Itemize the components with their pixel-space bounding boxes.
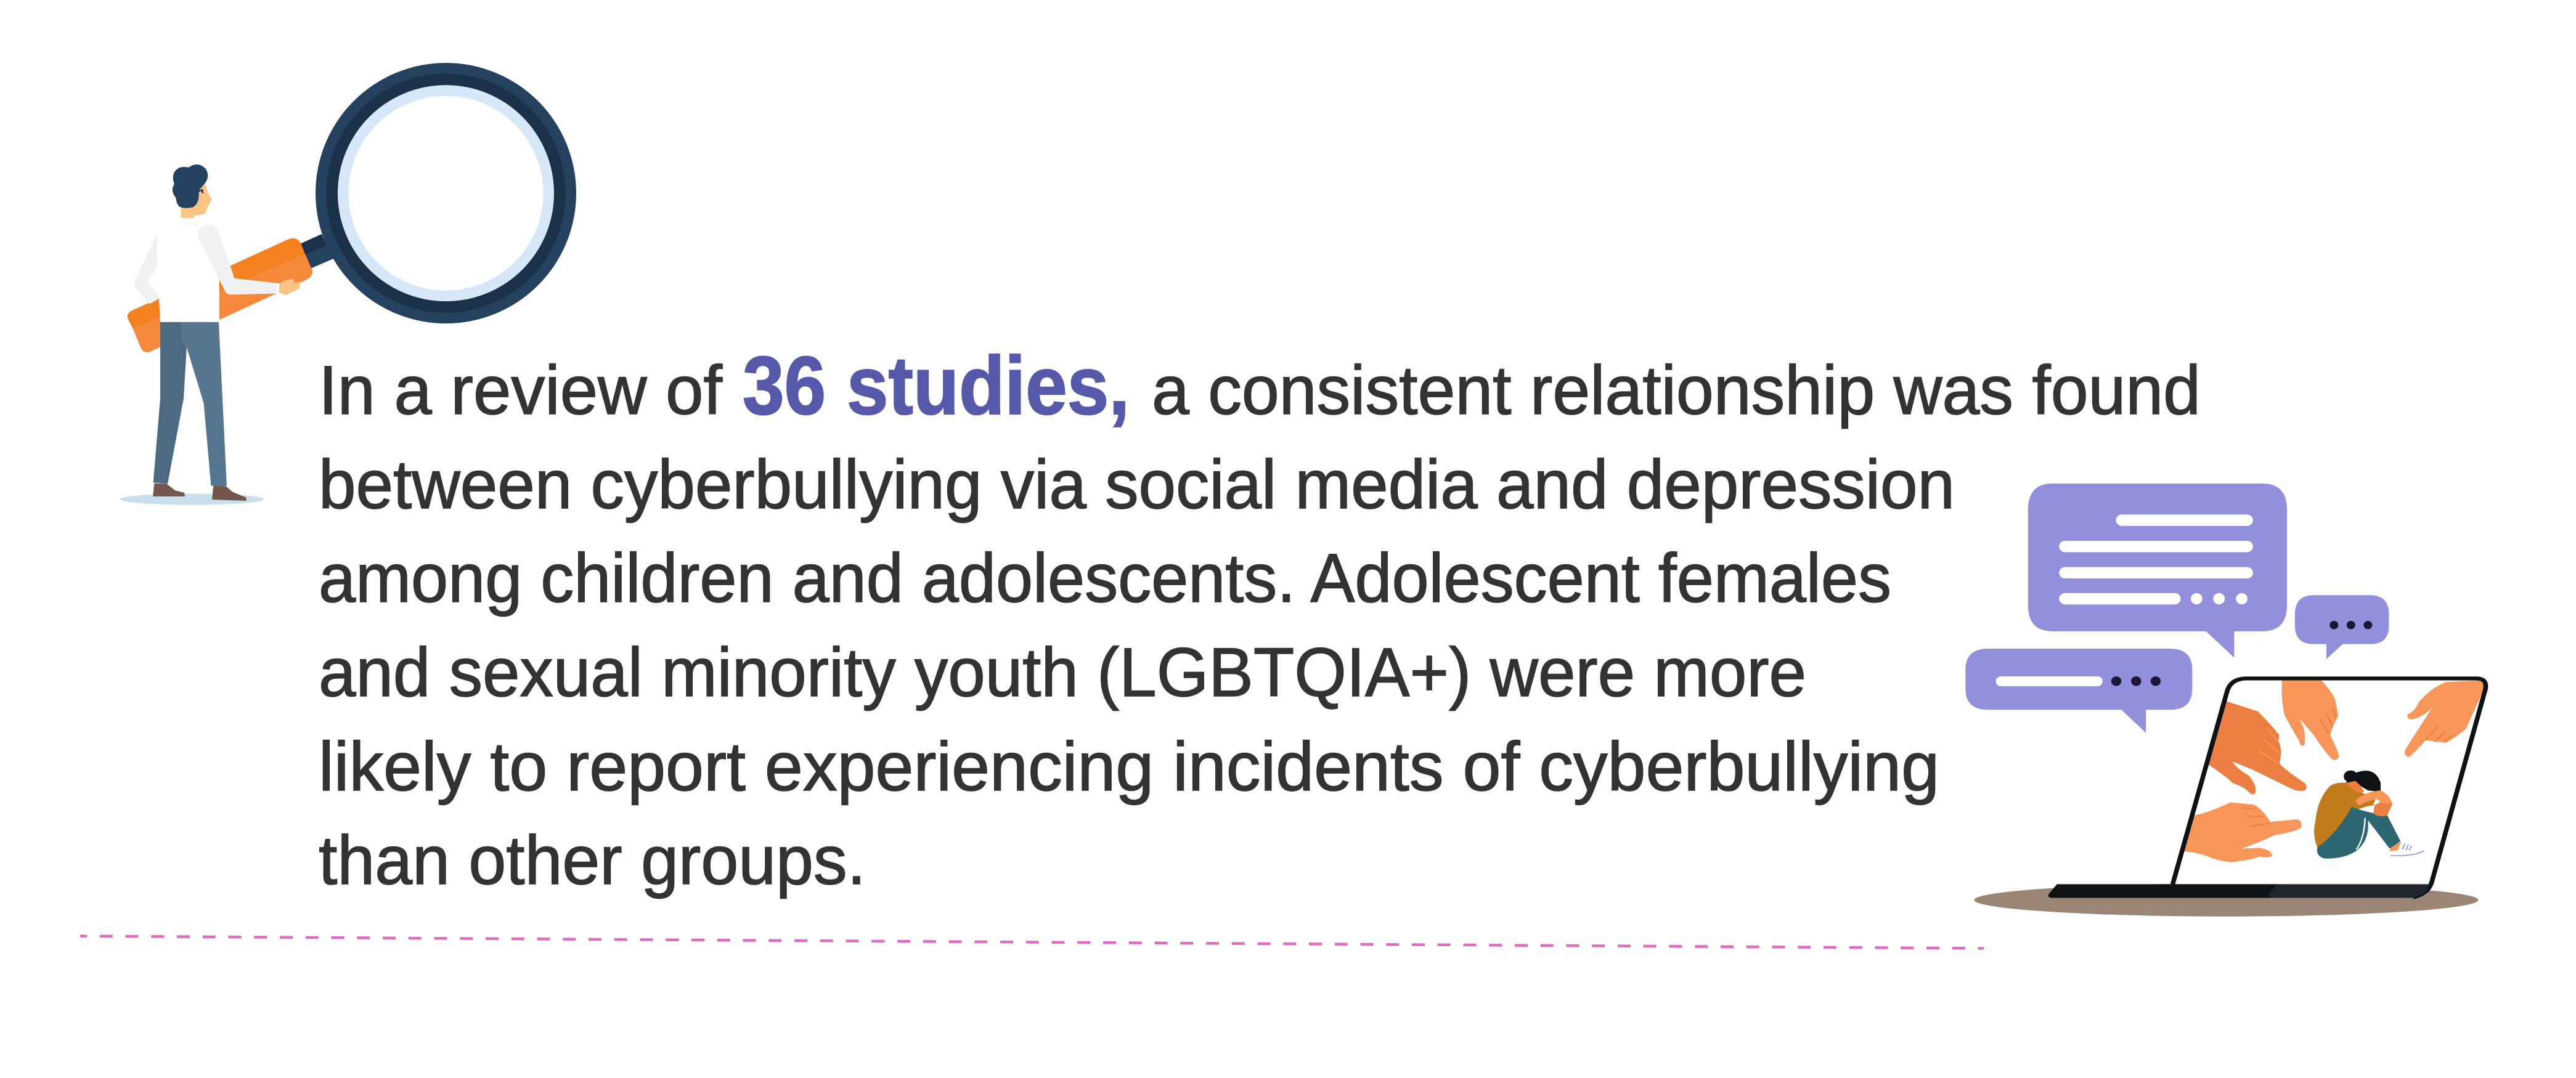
shoe <box>2391 851 2424 856</box>
sweater <box>2314 782 2375 847</box>
magnifier neck <box>300 234 333 269</box>
text line 4: and sexual minority youth (LGBTQIA+) were more <box>319 634 1806 711</box>
pointing hands <box>2182 680 2487 862</box>
knee highlight <box>2357 818 2365 849</box>
text line 2: between cyberbullying via social media and depression <box>319 446 1955 523</box>
chat bubble: left <box>1965 649 2192 733</box>
person: shirt <box>157 216 230 322</box>
person: back arm <box>134 235 159 304</box>
highlighted stat: 36 studies: 36 studies, <box>743 340 1130 432</box>
infographic canvas <box>80 63 2488 950</box>
hair <box>2344 771 2381 792</box>
seated figure <box>2314 771 2424 859</box>
illustration: laptop with pointing hands and chat bubbles <box>1965 484 2487 917</box>
person: hand <box>279 278 300 295</box>
trousers <box>2317 807 2400 859</box>
laptop shadow <box>1974 883 2478 917</box>
hand: bottom left <box>2182 803 2302 862</box>
text line 1: continuation: a consistent relationship was found <box>1152 352 2201 429</box>
chat bubble: small right <box>2295 595 2389 659</box>
illustration: person holding magnifying glass <box>120 63 576 505</box>
laptop base <box>2048 884 2429 898</box>
person: cuff <box>277 283 280 293</box>
text line 1: intro: In a review of <box>319 352 723 429</box>
orange handle <box>128 238 312 352</box>
hand: top right <box>2405 680 2487 757</box>
foot <box>2390 842 2401 851</box>
person: neck and face <box>181 183 212 218</box>
finger creases <box>2243 708 2454 826</box>
icon: magnifying glass handle and person <box>120 164 333 505</box>
icon: magnifying glass lens <box>316 63 576 323</box>
laptop screen frame <box>2173 678 2486 898</box>
person: hair <box>173 164 208 208</box>
chat bubble: large <box>2028 484 2287 657</box>
hand: left dark <box>2207 700 2307 794</box>
text line 3: among children and adolescents. Adolescent females <box>319 540 1891 617</box>
person: glasses arm <box>198 189 204 193</box>
person: shoes <box>153 483 247 501</box>
face and arms <box>2346 781 2365 792</box>
ground shadow <box>120 493 264 505</box>
laptop screen <box>2173 678 2486 884</box>
hand: top middle <box>2282 680 2339 760</box>
person: front arm <box>198 225 279 294</box>
text line 6: than other groups. <box>319 822 866 899</box>
main paragraph <box>319 340 2201 899</box>
text line 5: likely to report experiencing incidents of cyberbullying <box>319 728 1939 805</box>
person: trousers <box>153 322 227 486</box>
